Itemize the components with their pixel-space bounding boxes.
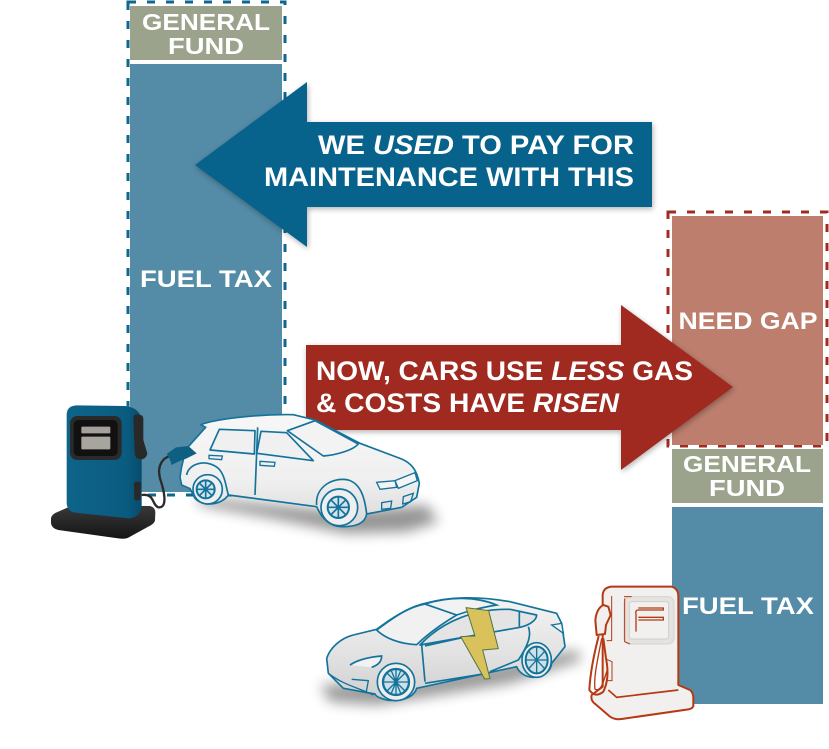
left fuel tax block (130, 64, 282, 492)
red arrow: present shortfall (306, 305, 734, 472)
icon: blue fuel pump (51, 405, 197, 539)
blue arrow: past funding: MAINTENANCE WITH THIS (264, 162, 634, 192)
right general fund block: GENERAL (683, 451, 811, 477)
left funding column (128, 2, 285, 495)
icon: gasoline car (180, 415, 438, 533)
right fuel tax block (672, 507, 823, 704)
icon: electric car (320, 598, 582, 705)
right general fund block: FUND (709, 475, 785, 501)
blue arrow: past funding (195, 82, 653, 249)
right general fund block (672, 449, 823, 503)
right fuel tax block: FUEL TAX (682, 593, 814, 620)
left general fund block: GENERAL (142, 9, 270, 35)
left general fund block (130, 6, 282, 60)
left general fund block: FUND (168, 33, 244, 59)
red arrow: present shortfall: NOW, CARS USE LESS GAS (316, 356, 693, 386)
need gap block: NEED GAP (678, 308, 818, 335)
blue arrow: past funding: WE USED TO PAY FOR (318, 130, 634, 160)
right funding column (668, 212, 827, 704)
left fuel tax block: FUEL TAX (140, 266, 272, 293)
need gap block (668, 212, 827, 446)
red arrow: present shortfall: & COSTS HAVE RISEN (316, 388, 620, 418)
icon: lightning bolt (461, 608, 498, 679)
icon: white fuel pump (589, 587, 693, 719)
